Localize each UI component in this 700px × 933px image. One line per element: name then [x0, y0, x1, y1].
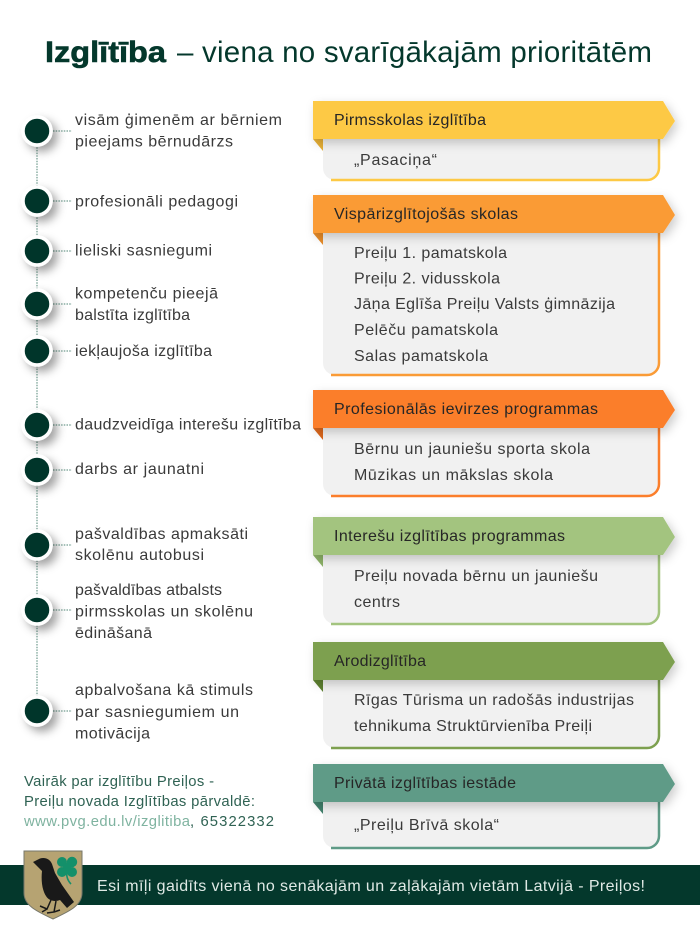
benefit: school meals [23, 582, 253, 642]
panel: general schools: Jāņa Eglīša Preiļu Valsts ģimnāzija [354, 295, 615, 313]
panel: general schools: Vispārizglītojošās skolas [334, 206, 518, 223]
panel: general schools: Salas pamatskola [354, 348, 488, 365]
panel: professional programmes: Mūzikas un mākslas skola [354, 467, 553, 484]
benefit: school buses: pašvaldības apmaksāti [75, 526, 248, 543]
benefit: interest education: daudzveidīga interešu izglītība [75, 416, 301, 434]
benefit: kindergarten: visām ģimenēm ar bērniem [75, 111, 282, 129]
panel: preschool: „Pasaciņa“ [354, 152, 437, 169]
contact text: , 65322332 [190, 814, 274, 830]
panel: professional programmes: Profesionālās ievirzes programmas [334, 401, 598, 418]
benefit: inclusive education: iekļaujoša izglītība [75, 343, 212, 360]
panel: general schools: Preiļu 2. vidusskola [354, 270, 500, 288]
benefit: school buses [23, 526, 248, 564]
benefit: awards: par sasniegumiem un [75, 704, 239, 721]
timeline of benefits [23, 111, 301, 742]
benefit: competence education [23, 286, 218, 324]
benefit: competence education: balstīta izglītība [75, 307, 190, 324]
panel: vocational: Arodizglītība [334, 653, 426, 670]
icon: coat of arms [24, 851, 82, 919]
panel: general schools [313, 195, 675, 375]
panel: general schools: Pelēču pamatskola [354, 322, 498, 339]
benefit: awards: motivācija [75, 726, 150, 742]
panel: general schools: Preiļu 1. pamatskola [354, 245, 507, 262]
benefit: school meals: pašvaldības atbalsts [75, 582, 222, 599]
benefit: teachers: profesionāli pedagogi [75, 194, 238, 210]
footer band: Esi mīļi gaidīts vienā no senākajām un zaļākajām vietām Latvijā - Preiļos! [97, 878, 645, 895]
panel: interest programmes: Interešu izglītības programmas [334, 528, 565, 545]
benefit: school buses: skolēnu autobusi [75, 547, 204, 564]
panel: interest programmes [313, 517, 675, 624]
panel: professional programmes [313, 390, 675, 496]
panel: vocational [313, 642, 675, 748]
benefit: awards [23, 682, 253, 742]
panel: interest programmes: Preiļu novada bērnu un jauniešu [354, 568, 598, 585]
panel: professional programmes: Bērnu un jauniešu sporta skola [354, 441, 590, 458]
benefit: competence education: kompetenču pieejā [75, 286, 218, 302]
title: – viena no svarīgākajām prioritātēm [177, 36, 652, 69]
panel: interest programmes: centrs [354, 594, 400, 611]
benefit: inclusive education [23, 337, 212, 365]
benefit: school meals: ēdināšanā [75, 625, 152, 642]
benefit: youth work: darbs ar jaunatni [75, 461, 204, 478]
panel: preschool: Pirmsskolas izglītība [334, 112, 486, 129]
panel: vocational: Rīgas Tūrisma un radošās industrijas [354, 692, 634, 709]
panel: vocational: tehnikuma Struktūrvienība Preiļi [354, 718, 592, 735]
benefit: awards: apbalvošana kā stimuls [75, 682, 253, 699]
benefit: teachers [23, 187, 238, 215]
benefit: school meals: pirmsskolas un skolēnu [75, 604, 253, 620]
contact text [23, 774, 274, 830]
contact text: Vairāk par izglītību Preiļos - [24, 774, 214, 790]
contact text: Preiļu novada Izglītības pārvaldē: [24, 794, 255, 810]
title: Izglītība [45, 36, 167, 69]
panel: private: „Preiļu Brīvā skola“ [354, 817, 499, 834]
benefit: kindergarten [23, 111, 282, 150]
panel: private: Privātā izglītības iestāde [334, 775, 516, 792]
panel: preschool [313, 101, 675, 180]
raven [33, 858, 74, 908]
panel: private [313, 764, 675, 848]
footer band [0, 865, 700, 905]
benefit: kindergarten: pieejams bērnudārzs [75, 134, 233, 150]
benefit: youth work [23, 456, 204, 484]
benefit: achievements: lieliski sasniegumi [75, 242, 212, 260]
clover [57, 857, 77, 884]
benefit: achievements [23, 237, 212, 265]
benefit: interest education [23, 411, 301, 439]
contact text: www.pvg.edu.lv/izglitiba [23, 814, 191, 830]
